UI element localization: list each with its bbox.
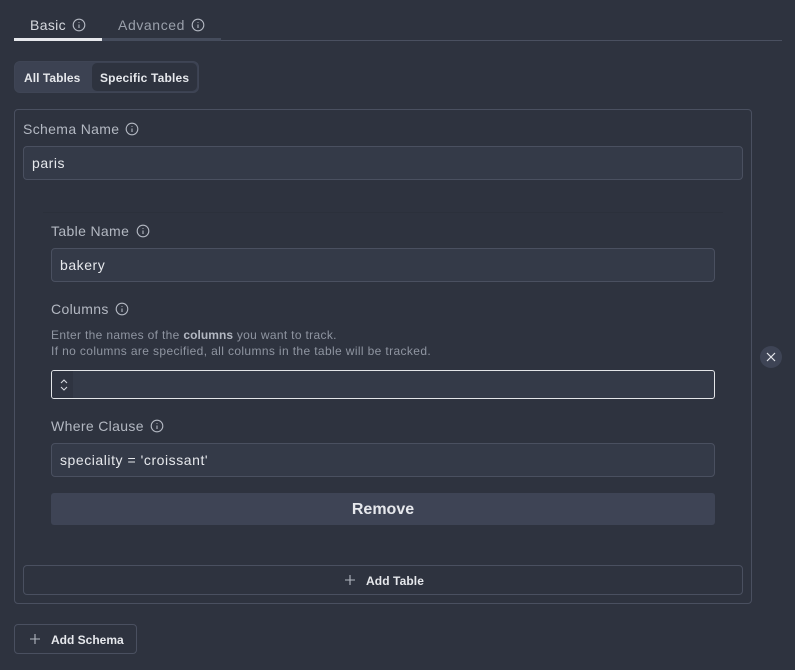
- segmented control: [14, 61, 199, 93]
- option: Specific Tables: [92, 63, 197, 91]
- panel: table: [43, 212, 723, 537]
- icon: plus: [345, 575, 355, 585]
- icon: columns info: [116, 302, 128, 316]
- button: Add Table: [23, 565, 743, 595]
- label: Add Table: Add Table: [366, 574, 424, 588]
- tab: Advanced: [102, 10, 221, 41]
- chevron cell: [52, 371, 73, 398]
- button: close: [760, 346, 782, 368]
- icon: where info: [150, 420, 164, 432]
- heading: Columns: Columns: [51, 301, 109, 317]
- label: Add Schema: Add Schema: [51, 633, 124, 647]
- option: Specific Tables: Specific Tables: [100, 71, 189, 85]
- heading: Schema Name: Schema Name: [23, 121, 119, 137]
- input: where clause: [51, 443, 715, 477]
- heading: Table Name: Table Name: [51, 223, 129, 239]
- input: columns select: [51, 370, 715, 399]
- icon: plus: [30, 634, 40, 644]
- panel: schema: [14, 109, 752, 604]
- input: table name: bakery: [60, 257, 105, 273]
- tab: Basic: Basic: [30, 17, 66, 33]
- input: schema name: paris: [32, 155, 65, 171]
- tab: Basic: [14, 10, 102, 41]
- icon: table info: [136, 224, 150, 238]
- input: table name: [51, 248, 715, 282]
- icon: chevrons: [60, 379, 68, 391]
- button: Remove: Remove: [352, 501, 414, 518]
- icon: schema info: [126, 122, 138, 136]
- option: All Tables: All Tables: [24, 71, 80, 85]
- tab: Advanced: Advanced: [118, 17, 185, 33]
- button: Add Schema: [14, 624, 137, 654]
- help text: columns: [51, 328, 431, 358]
- input: where clause: speciality = 'croissant': [60, 452, 208, 468]
- button: Remove: [51, 493, 715, 525]
- tabs: [14, 10, 782, 41]
- help text: columns: If no columns are specified, all columns in the table will be tracked.: [51, 344, 431, 358]
- input: schema name: [23, 146, 743, 180]
- heading: Where Clause: Where Clause: [51, 418, 144, 434]
- icon: x: [766, 352, 776, 362]
- help text: columns: Enter the names of the columns you want to track.: [51, 328, 337, 342]
